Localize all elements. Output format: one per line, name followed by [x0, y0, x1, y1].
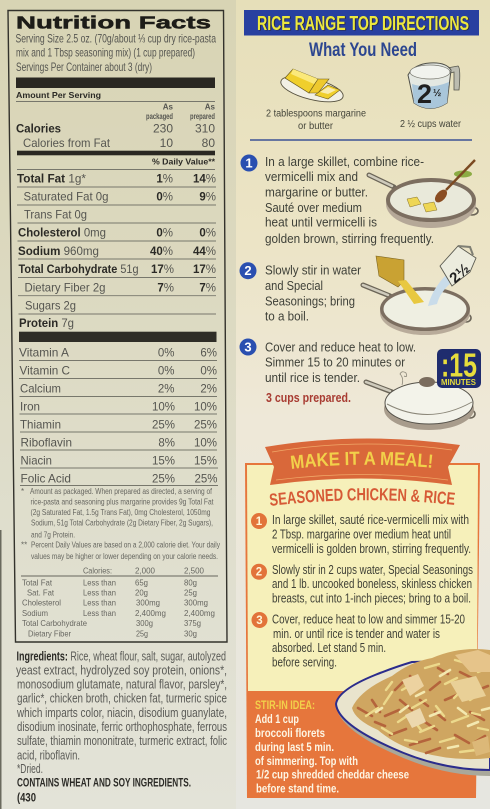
orange panel background — [245, 463, 480, 798]
recipe step 3 — [252, 612, 465, 670]
icon: skillet with seasoning and water pouring: 2½ — [446, 260, 473, 287]
daily values reference table: 300g — [136, 618, 153, 628]
serving size text: mix and 1 Tbsp seasoning mix) (1 cup prepared) — [16, 46, 195, 60]
vitamins and minerals rows: Folic Acid — [20, 472, 71, 486]
calories rows: Calories — [16, 122, 61, 136]
stir-in idea callout: STIR-IN IDEA: — [255, 698, 315, 712]
ingredients text block: garlic*, chicken broth, chicken fat, turmeric spice — [17, 692, 227, 706]
vitamins and minerals rows: 6% — [200, 348, 217, 360]
recipe step 3: before serving. — [272, 656, 337, 670]
step 2: 2 — [244, 263, 252, 278]
recipe step 2 — [251, 563, 473, 606]
vitamins and minerals rows: 2% — [200, 384, 217, 396]
calories rows: Calories from Fat — [23, 136, 111, 150]
nutrient rows: Protein 7g — [19, 316, 74, 330]
daily values reference table — [21, 566, 218, 638]
vitamins and minerals rows: 0% — [200, 366, 217, 378]
nutrient rows: 9% — [199, 192, 216, 204]
vitamins and minerals rows: Vitamin C — [20, 364, 70, 378]
background: right panel — [236, 0, 490, 809]
nutrient rows: 14% — [193, 174, 216, 186]
recipe step 1: 1 — [256, 516, 263, 528]
vitamins and minerals rows: 0% — [158, 348, 174, 360]
column headers: As — [163, 102, 174, 112]
ingredient caption: margarine: or butter — [298, 121, 334, 132]
vitamins and minerals rows: 2% — [158, 384, 174, 396]
daily values reference table: 2,400mg — [184, 608, 215, 618]
daily values reference table: Less than — [83, 608, 116, 618]
nutrient rows: 40% — [150, 246, 173, 258]
pale yellow recipe area — [247, 465, 478, 691]
step 1: vermicelli mix and — [265, 169, 358, 184]
calories rows — [16, 122, 215, 150]
vitamins and minerals rows: Calcium — [20, 382, 61, 396]
daily values reference table: 2,500 — [184, 566, 204, 576]
step 2 — [240, 262, 362, 324]
footnotes: Amount as packaged. When prepared as directed, a serving of — [30, 487, 213, 496]
rice pile — [352, 649, 490, 759]
calories rows: 230 — [153, 122, 173, 136]
column headers: As — [205, 102, 216, 112]
column headers — [146, 102, 216, 121]
ingredients text block: acid, riboflavin. — [17, 749, 80, 763]
vitamins and minerals rows: 10% — [152, 402, 175, 414]
stir-in idea callout — [255, 698, 409, 796]
nutrient rows: Sodium 960mg — [18, 244, 99, 258]
step 3: Cover and reduce heat to low. — [265, 339, 416, 354]
daily values reference table: 80g — [184, 578, 197, 588]
vitamins and minerals rows: 25% — [194, 420, 217, 432]
ingredients text block — [16, 650, 227, 805]
vitamins and minerals rows: 15% — [194, 456, 217, 468]
nutrient rows: Sugars 2g — [25, 299, 76, 313]
footnotes — [21, 487, 220, 561]
vitamins and minerals rows: 25% — [194, 474, 218, 486]
amount per serving header: Amount Per Serving — [16, 90, 101, 100]
nutrient rows: 44% — [193, 246, 216, 258]
calories rows: 80 — [202, 136, 215, 150]
ingredients text block: monosodium glutamate, natural flavor, parsley*, — [17, 678, 227, 692]
panel: rice range top directions — [240, 10, 481, 430]
recipe step 1 — [251, 513, 471, 556]
vitamins and minerals rows: 0% — [158, 366, 174, 378]
photo: plate of chicken and rice — [336, 649, 490, 776]
nutrient rows: 0% — [156, 192, 173, 204]
vitamins and minerals rows: Thiamin — [20, 418, 61, 432]
step 1: 1 — [245, 156, 253, 170]
icon: butter on dish — [278, 69, 346, 107]
panel: nutrition facts — [8, 10, 227, 642]
daily values reference table: 65g — [135, 578, 148, 588]
daily values reference table: Dietary Fiber — [28, 628, 71, 638]
serving size text: Servings Per Container about 3 (dry) — [16, 60, 152, 74]
vitamins and minerals rows: 8% — [158, 438, 175, 450]
footnotes: ** — [21, 540, 27, 550]
step 3: until rice is tender. — [265, 370, 360, 385]
nutrient rows: 7% — [157, 283, 174, 295]
stir-in idea callout: before stand time. — [256, 782, 339, 796]
icon: skillet with seasoning and water pouring — [363, 246, 476, 335]
daily value header: % Daily Value** — [152, 158, 216, 167]
nutrient rows: Saturated Fat 0g — [24, 190, 108, 204]
subheading: what you need: What You Need — [309, 40, 417, 61]
stir-in idea callout: of simmering. Top with — [255, 754, 358, 768]
column headers: packaged — [146, 112, 173, 121]
vitamins and minerals rows: Niacin — [20, 454, 52, 468]
step 1: margarine or butter. — [265, 185, 368, 200]
recipe step 2: 2 — [256, 567, 262, 579]
daily values reference table: 2,000 — [135, 566, 155, 576]
title: Nutrition Facts — [16, 13, 211, 33]
vitamins and minerals rows: 15% — [152, 456, 175, 468]
nutrient rows: Cholesterol 0mg — [18, 226, 106, 240]
footnotes: values may be higher or lower depending on your calorie needs. — [31, 552, 218, 561]
footnotes: Sodium, 51g Total Carbohydrate (2g Dietary Fiber, 2g Sugars), — [31, 519, 213, 528]
recipe step 3: 3 — [256, 615, 263, 627]
recipe title: SEASONED CHICKEN & RICE — [270, 488, 455, 506]
footnotes: and 7g Protein. — [31, 530, 75, 540]
daily values reference table: Cholesterol — [22, 598, 61, 608]
step 3: 3 cups prepared. — [266, 391, 351, 405]
daily values reference table: Less than — [83, 578, 116, 588]
vitamins and minerals rows: Riboflavin — [20, 436, 72, 450]
icon: skillet with butter and spoon — [369, 160, 478, 228]
icon: covered skillet — [366, 372, 475, 430]
nutrient rows: Dietary Fiber 2g — [24, 281, 106, 295]
nutrient rows: 7% — [199, 283, 216, 295]
daily values reference table: Sat. Fat — [27, 588, 55, 598]
step 2: Seasonings; bring — [265, 293, 355, 308]
step 2: Slowly stir in water — [265, 263, 362, 278]
step 1: Sauté over medium — [265, 200, 362, 215]
daily values reference table: Total Fat — [22, 578, 53, 588]
step 3: Simmer 15 to 20 minutes or — [265, 355, 406, 370]
footnotes: * — [21, 487, 24, 496]
nutrient rows: 0% — [199, 228, 216, 240]
vitamins and minerals rows: Vitamin A — [19, 346, 69, 360]
step 1 — [240, 154, 434, 246]
ingredients text block: which imparts color, niacin, disodium guanylate, — [16, 706, 227, 720]
footnotes: Percent Daily Values are based on a 2,000 calorie diet. Your daily — [31, 540, 220, 550]
calories rows: 10 — [160, 136, 173, 150]
step 3 — [240, 338, 416, 405]
ingredients text block: sulfate, thiamin mononitrate, turmeric extract, folic — [17, 734, 227, 748]
footnotes: (2g Saturated Fat, 1.5g Trans Fat), 0mg Cholesterol, 1050mg — [30, 508, 210, 517]
nutrient rows: Total Fat 1g* — [17, 172, 86, 186]
daily values reference table: 300mg — [184, 598, 208, 608]
daily values reference table: 300mg — [136, 598, 160, 608]
stir-in idea callout: during last 5 min. — [255, 740, 334, 754]
vitamins and minerals rows: 10% — [194, 438, 217, 450]
daily values reference table: 25g — [136, 628, 148, 638]
daily values reference table: Less than — [83, 598, 116, 608]
vitamins and minerals rows: 25% — [152, 474, 175, 486]
step 1: heat until vermicelli is — [265, 215, 377, 230]
badge: 15 minutes: MINUTES — [441, 378, 477, 387]
step 2: and Special — [265, 278, 323, 293]
calories rows: 310 — [195, 122, 215, 136]
daily values reference table: Sodium — [22, 608, 48, 618]
nutrient rows — [17, 172, 216, 330]
nutrient rows: 17% — [193, 264, 216, 276]
step 2: to a boil. — [265, 309, 309, 324]
vitamins and minerals rows: 25% — [152, 420, 175, 432]
ingredient caption: water: 2 ½ cups water — [400, 119, 462, 130]
ingredients text block: Ingredients: Rice, wheat flour, salt, sugar, autolyzed — [16, 650, 226, 664]
nutrient rows: Total Carbohydrate 51g — [18, 262, 138, 276]
ingredients text block: *Dried. — [17, 762, 43, 776]
stir-in idea callout: Add 1 cup — [255, 712, 299, 726]
background: left panel — [0, 0, 236, 809]
daily values reference table: 20g — [135, 588, 148, 598]
serving size text: Serving Size 2.5 oz. (70g/about ⅓ cup dry rice-pasta — [16, 32, 216, 46]
recipe step 3: absorbed. Let stand 5 min. — [272, 641, 386, 655]
ingredients text block: disodium inosinate, ferric orthophosphate, ferrous — [17, 720, 227, 734]
ingredients text block: yeast extract, hydrolyzed soy protein, onions*, — [16, 663, 227, 677]
icon: measuring cup: ½ — [433, 88, 441, 99]
daily values reference table: 375g — [184, 618, 201, 628]
step 1: In a large skillet, combine rice- — [265, 154, 424, 169]
ingredient caption: margarine — [266, 109, 366, 132]
serving size text — [16, 32, 216, 74]
stir-in idea callout: 1/2 cup shredded cheddar cheese — [256, 768, 409, 782]
recipe step 3: min. or until rice is tender and water is — [273, 627, 440, 641]
vitamins and minerals rows: Iron — [20, 400, 40, 414]
vitamins and minerals rows — [19, 346, 218, 486]
nutrient rows: 0% — [156, 228, 173, 240]
nutrient rows: Trans Fat 0g — [24, 208, 87, 222]
nutrient rows: 1% — [156, 174, 173, 186]
ribbon banner: MAKE IT A MEAL! — [290, 452, 432, 469]
badge: 15 minutes: :15 — [441, 346, 477, 384]
daily values reference table: Total Carbohydrate — [22, 618, 87, 628]
footnotes: rice-pasta and seasoning plus margarine provides 9g Total Fat — [30, 498, 214, 506]
daily values reference table: Calories: — [83, 566, 112, 576]
ribbon banner — [265, 438, 460, 485]
step 3: 3 — [244, 340, 252, 354]
icon: measuring cup: 2 — [417, 79, 432, 109]
stir-in idea callout: broccoli florets — [255, 726, 325, 740]
daily values reference table: Less than — [83, 588, 116, 598]
step 1: golden brown, stirring frequently. — [265, 231, 434, 246]
panel: make it a meal — [245, 438, 490, 798]
daily values reference table: 2,400mg — [135, 608, 166, 618]
nutrient rows: 17% — [151, 264, 174, 276]
ingredients text block: CONTAINS WHEAT AND SOY INGREDIENTS. — [17, 776, 191, 790]
icon: measuring cup — [408, 63, 460, 109]
ingredient caption: margarine: 2 tablespoons margarine — [266, 109, 366, 120]
vitamins and minerals rows: 10% — [194, 402, 217, 414]
column headers: prepared — [190, 112, 215, 121]
daily values reference table: 25g — [184, 588, 197, 598]
ingredients text block: (430 — [17, 791, 36, 805]
daily values reference table: 30g — [184, 628, 197, 638]
